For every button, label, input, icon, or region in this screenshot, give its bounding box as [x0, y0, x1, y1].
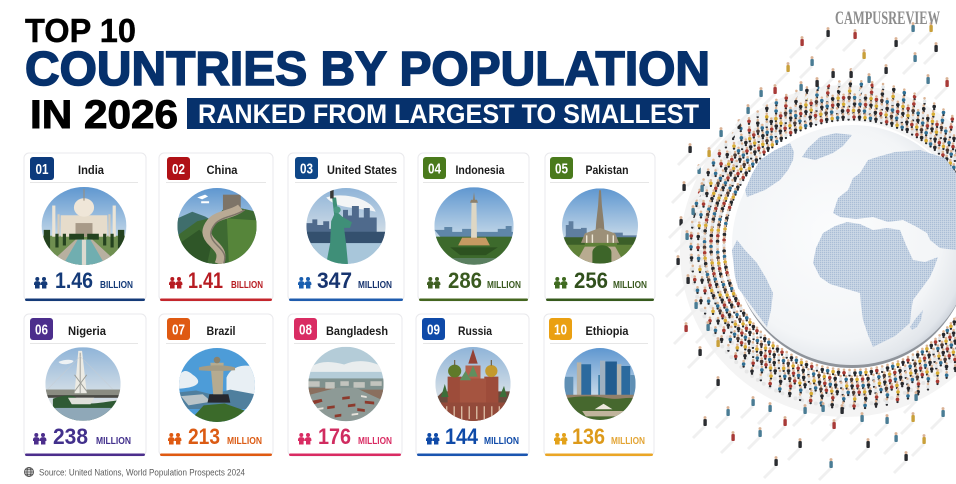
continents [732, 133, 956, 347]
title: Countries by Population: COUNTRIES BY POPULATION [25, 43, 710, 96]
accent bar [289, 454, 401, 456]
scattered people [678, 28, 947, 464]
country name: Brazil [206, 324, 236, 338]
panel: Bangladesh [288, 314, 402, 456]
rank badge 05 [550, 157, 573, 179]
population value: 1.41 [188, 268, 223, 293]
country name: China [206, 163, 238, 177]
panel: Ethiopia [544, 314, 654, 456]
country name: India [78, 163, 104, 177]
rank badge 05: 05 [555, 162, 568, 178]
illustration: globe surrounded by crowd [673, 28, 956, 464]
card background [24, 314, 146, 456]
rank badge 10: 10 [554, 322, 567, 338]
country name: Nigeria [68, 324, 106, 338]
accent bar [25, 298, 145, 301]
globe shadow [734, 132, 956, 368]
icon: globe [24, 468, 34, 476]
rank badge 07: 07 [172, 322, 185, 338]
card background [159, 153, 273, 301]
title: In 2026: IN 2026 [30, 93, 178, 137]
panel: Indonesia [418, 153, 529, 301]
accent bar [160, 454, 272, 456]
photo: Great Wall [177, 188, 257, 266]
country name: Russia [458, 324, 492, 338]
rank badge 06: 06 [35, 322, 48, 338]
rank badge 08 [294, 318, 317, 340]
unit: MILLION [487, 280, 521, 291]
crowd ring around globe [673, 63, 956, 427]
title block [25, 12, 710, 137]
country name: Bangladesh [326, 324, 388, 338]
icon: people [34, 277, 47, 288]
icon: people [426, 433, 439, 444]
unit: MILLION [611, 436, 645, 447]
globe [732, 125, 956, 365]
title: Top 10: TOP 10 [25, 12, 136, 49]
card background [159, 314, 273, 456]
population value: 1.46 [55, 268, 93, 293]
photo: Minar-e-Pakistan [562, 188, 638, 264]
accent bar [419, 298, 528, 301]
rank badge 09: 09 [427, 322, 440, 338]
photo: Christ the Redeemer [179, 348, 255, 422]
panel: Brazil [159, 314, 273, 456]
panel: Russia [416, 314, 529, 456]
source text: Source: United Nations, World Population Prospects 2024 [39, 468, 245, 478]
panel: China [159, 153, 273, 301]
photo: Taj Mahal [42, 187, 126, 265]
icon: people [33, 433, 46, 444]
rank badge 07 [167, 318, 190, 340]
rank badge 01 [30, 157, 54, 180]
accent bar [417, 454, 528, 456]
card background [288, 153, 404, 301]
subtitle banner: RANKED FROM LARGEST TO SMALLEST [198, 99, 699, 129]
panel: Pakistan [545, 153, 655, 301]
card background [288, 314, 402, 456]
card background [418, 153, 529, 301]
unit: MILLION [358, 436, 392, 447]
country name: Indonesia [456, 163, 505, 177]
rank badge 03: 03 [300, 162, 313, 178]
icon: people [168, 433, 181, 444]
photo: Monas monument [434, 187, 514, 265]
rank badge 02: 02 [172, 162, 185, 178]
population value: 286 [448, 268, 482, 293]
accent bar [545, 454, 653, 456]
accent bar [160, 298, 272, 301]
rank badge 09 [422, 318, 445, 340]
unit: MILLION [96, 436, 131, 447]
rank badge 04: 04 [428, 162, 441, 178]
unit: MILLION [484, 436, 519, 447]
card background [24, 153, 146, 301]
population value: 144 [445, 424, 479, 449]
icon: people [554, 277, 567, 288]
card background [545, 153, 655, 301]
rank badge 06 [30, 318, 53, 340]
photo: Saint Basil's Cathedral [435, 347, 511, 421]
unit: MILLION [358, 280, 392, 291]
rank badge 10 [549, 318, 572, 340]
card background [544, 314, 654, 456]
unit: MILLION [227, 436, 262, 447]
unit: MILLION [613, 280, 647, 291]
population value: 176 [318, 424, 351, 449]
photo: Statue of Liberty [305, 188, 386, 264]
crowd shadows [691, 102, 956, 406]
panel: India [24, 153, 146, 301]
rank badge 04 [423, 157, 446, 179]
accent bar [546, 298, 654, 301]
accent bar [25, 454, 145, 456]
population value: 136 [572, 424, 605, 449]
unit: BILLION [231, 280, 263, 291]
population value: 213 [188, 424, 220, 449]
icon: people [427, 277, 440, 288]
country name: Ethiopia [586, 324, 629, 338]
accent bar [289, 298, 403, 301]
panel: United States [288, 153, 404, 301]
population value: 238 [53, 424, 88, 449]
rank badge 02 [167, 157, 190, 180]
icon: people [298, 433, 311, 444]
country name: Pakistan [586, 163, 628, 177]
population value: 347 [317, 268, 352, 293]
unit: BILLION [100, 280, 133, 291]
rank badge 03 [295, 157, 318, 179]
photo: Addis Ababa skyline [564, 348, 636, 420]
population value: 256 [574, 268, 608, 293]
rank badge 08: 08 [299, 322, 312, 338]
rank badge 01: 01 [36, 162, 48, 178]
photo: Lekki bridge [45, 347, 121, 421]
photo: Dhaka river [308, 347, 384, 421]
icon: people [169, 277, 182, 288]
card background [416, 314, 529, 456]
country name: United States [327, 163, 397, 177]
icon: people [554, 433, 567, 444]
source note [24, 468, 245, 478]
icon: people [298, 277, 311, 288]
panel: Nigeria [24, 314, 146, 456]
